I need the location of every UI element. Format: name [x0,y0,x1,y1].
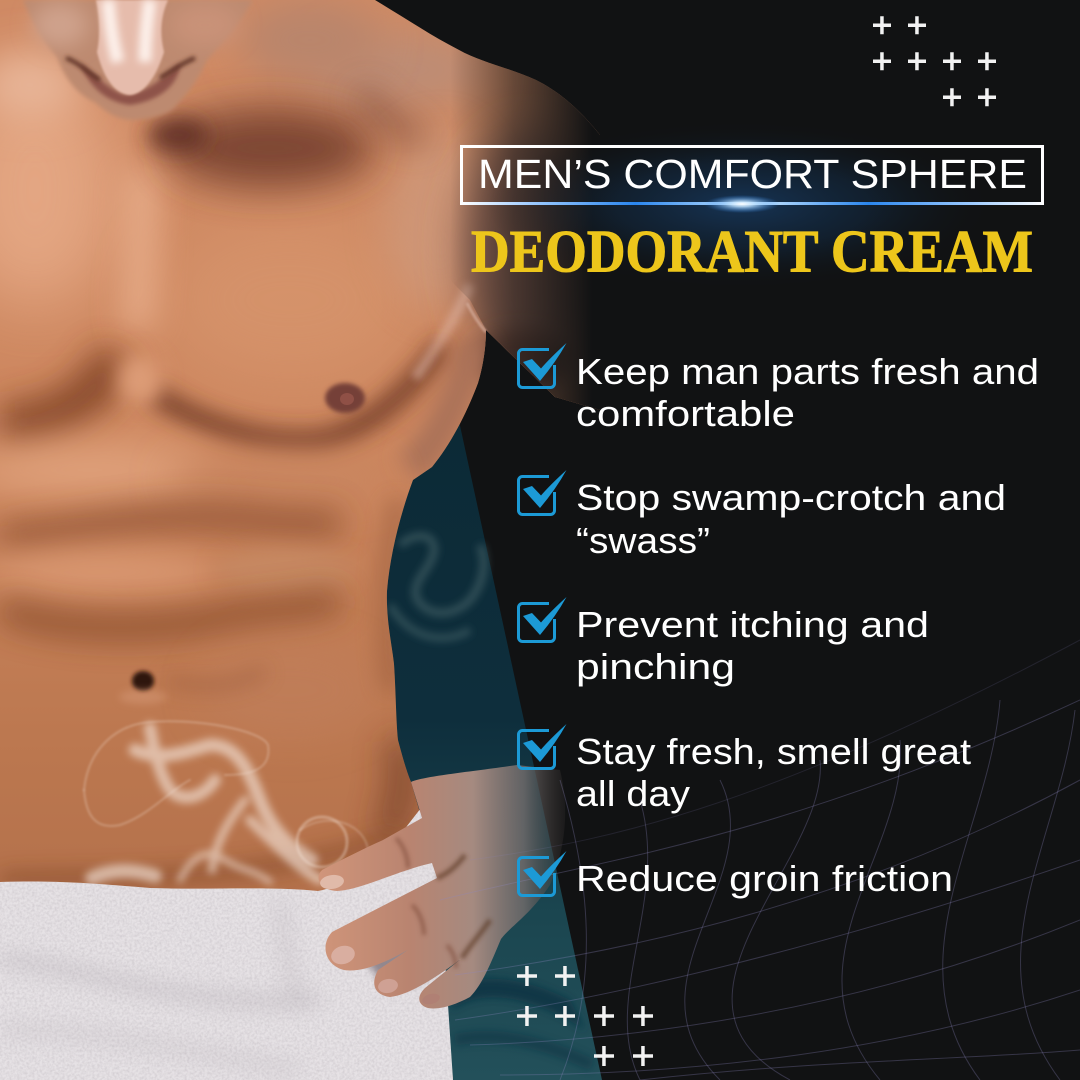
check icon [518,724,566,768]
benefit 3 [518,597,929,687]
check icon [518,597,566,642]
benefit 5 [518,851,953,899]
benefit 5: Reduce groin friction [576,858,953,899]
shoulder tone [310,34,490,106]
pec edge highlight [415,285,470,378]
knuckle and finger shading [396,838,456,968]
benefit 1: comfortable [576,393,795,434]
lower belly shadow above towel [0,835,400,880]
check icon [518,851,566,896]
armpit crease [467,303,486,332]
heading: Men's Comfort Sphere: MEN’S COMFORT SPHERE [478,151,1027,197]
benefit 2: “swass” [576,520,710,561]
neck and clavicle shadow [165,108,375,188]
benefit 4: Stay fresh, smell great [576,731,971,772]
chin and neck [23,0,253,120]
smoke wisps [84,721,368,882]
lips and mouth [80,63,180,105]
decorative plus signs top [873,16,996,106]
benefit 1: Keep man parts fresh and [576,351,1039,392]
wireframe grid decoration [440,640,1080,1080]
lens flare [704,195,780,213]
side ribs [410,340,475,470]
benefit 1 [518,343,1039,434]
benefit 2 [518,470,1006,561]
check icon [518,470,566,514]
blue glow behind title [487,120,997,290]
benefit 3: pinching [576,646,735,687]
nose [96,0,168,95]
arm tone [440,124,568,354]
chest highlights [0,70,120,310]
white towel [0,808,470,1080]
header title block [461,120,1043,290]
nipple [325,383,365,413]
title box [462,146,1042,204]
side shadow [385,740,402,835]
decorative plus signs bottom [517,966,653,1066]
check icon [518,343,566,388]
hand on hip [318,765,565,1008]
pec lower shadow [0,355,118,425]
benefit 4: all day [576,773,690,814]
hand silhouette [318,765,565,1008]
fingernails [319,873,345,891]
blue light bar [461,202,1043,205]
teal smoke wedge [375,421,602,1080]
benefit 3: Prevent itching and [576,604,929,645]
benefit 4 [518,724,971,814]
torso body [0,0,620,1080]
navel [119,671,167,704]
benefit 2: Stop swamp-crotch and [576,477,1006,518]
fade of shoulder and arm into background [455,48,600,410]
upper abs [0,442,215,498]
man torso photo illustration [0,0,620,1080]
